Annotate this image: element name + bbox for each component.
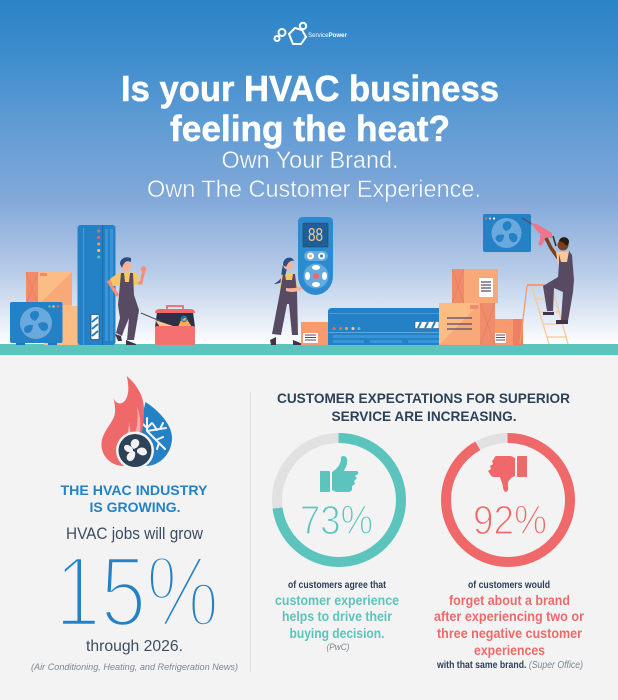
left text: industry heading: THE HVAC INDUSTRY [60,482,208,498]
illustration: technician waving [109,257,146,345]
logo: ServicePower [274,23,348,44]
text block: 73% caption: (PwC) [326,642,350,652]
text block: 73% caption [275,580,399,652]
text block: 92% caption [434,580,584,671]
illustration: remote control [298,217,333,295]
ground band [0,344,618,355]
text block: 92% caption: three negative customer [437,625,582,641]
big number: 15%: 15% [55,536,219,648]
illustration: boxes behind outdoor unit [26,272,78,345]
text block: 92% caption: experiences [474,642,545,658]
text block: 73% caption: helps to drive their [282,608,392,624]
left text: HVAC jobs will grow: HVAC jobs will grow [66,525,203,543]
left text: industry heading [60,482,208,515]
text block: 73% caption: of customers agree that [288,580,387,591]
subtitle: Own The Customer Experience. [147,176,481,203]
text block: 92% caption: with that same brand. (Super Office) [436,660,583,671]
illustration: wall AC unit [483,214,531,252]
illustration: long horizontal AC unit [328,308,440,345]
donut chart: 92% [446,438,570,562]
icon: flame, fan and snowflake [101,376,172,470]
subtitle [147,147,481,203]
illustration: remote control: 88 [308,225,323,245]
right heading [277,390,570,424]
donut value: 73%: 73% [300,497,373,543]
donut value: 92%: 92% [473,497,547,543]
illustration: stacked cardboard boxes [439,269,523,345]
right heading: SERVICE ARE INCREASING. [332,408,516,424]
text block: 73% caption: customer experience [275,592,399,608]
illustration: red toolbox [141,306,195,345]
left source note: (Air Conditioning, Heating, and Refrigeration News) [31,662,238,672]
illustration: technician holding remote [270,258,305,345]
donut chart: 73% [277,438,401,562]
icon: thumbs down [488,456,527,492]
text block: 92% caption: of customers would [468,580,550,591]
title: Is your HVAC business [121,68,499,109]
illustration: ladder [520,284,568,344]
left text: through 2026: through 2026. [86,638,183,655]
left text: industry heading: IS GROWING. [90,499,180,515]
text block: 92% caption: after experiencing two or [434,608,584,624]
subtitle: Own Your Brand. [222,147,398,174]
panel: sky header [0,0,618,345]
illustration: tall indoor unit [78,225,116,345]
title [121,68,499,149]
text block: 73% caption: buying decision. [290,625,384,641]
logo: ServicePower: ServicePower [308,33,348,39]
icon: thumbs up [320,456,358,492]
text block: 92% caption: forget about a brand [449,592,570,608]
right heading: CUSTOMER EXPECTATIONS FOR SUPERIOR [277,390,570,406]
illustration: outdoor AC unit [10,302,62,345]
title: feeling the heat? [170,108,450,149]
illustration: technician on ladder with drill [522,218,574,324]
illustration: small box with label [301,322,329,345]
